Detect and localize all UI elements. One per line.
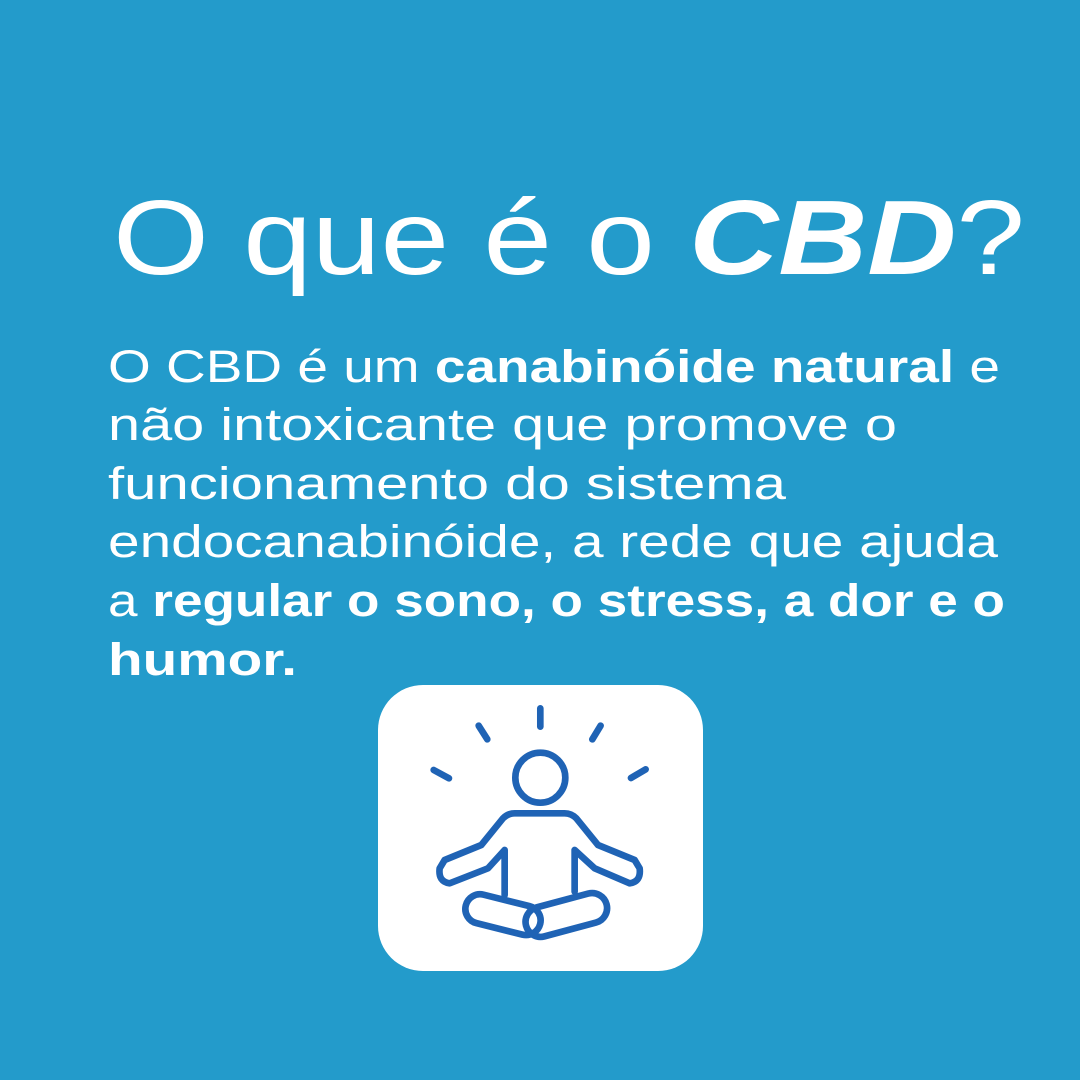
body text: a regular o sono, o stress, a dor e o — [108, 575, 1005, 626]
body text — [108, 341, 1005, 685]
head — [515, 753, 565, 803]
body text: não intoxicante que promove o — [108, 399, 897, 450]
rays — [434, 708, 646, 778]
body text: endocanabinóide, a rede que ajuda — [108, 516, 999, 567]
title: O que é o CBD ? — [113, 179, 1025, 297]
legs — [462, 891, 544, 938]
body text: humor. — [108, 634, 297, 685]
body text: O CBD é um canabinóide natural e — [108, 341, 1000, 392]
icon card: meditation — [378, 685, 703, 971]
body — [439, 813, 640, 895]
body text: funcionamento do sistema — [108, 458, 787, 509]
